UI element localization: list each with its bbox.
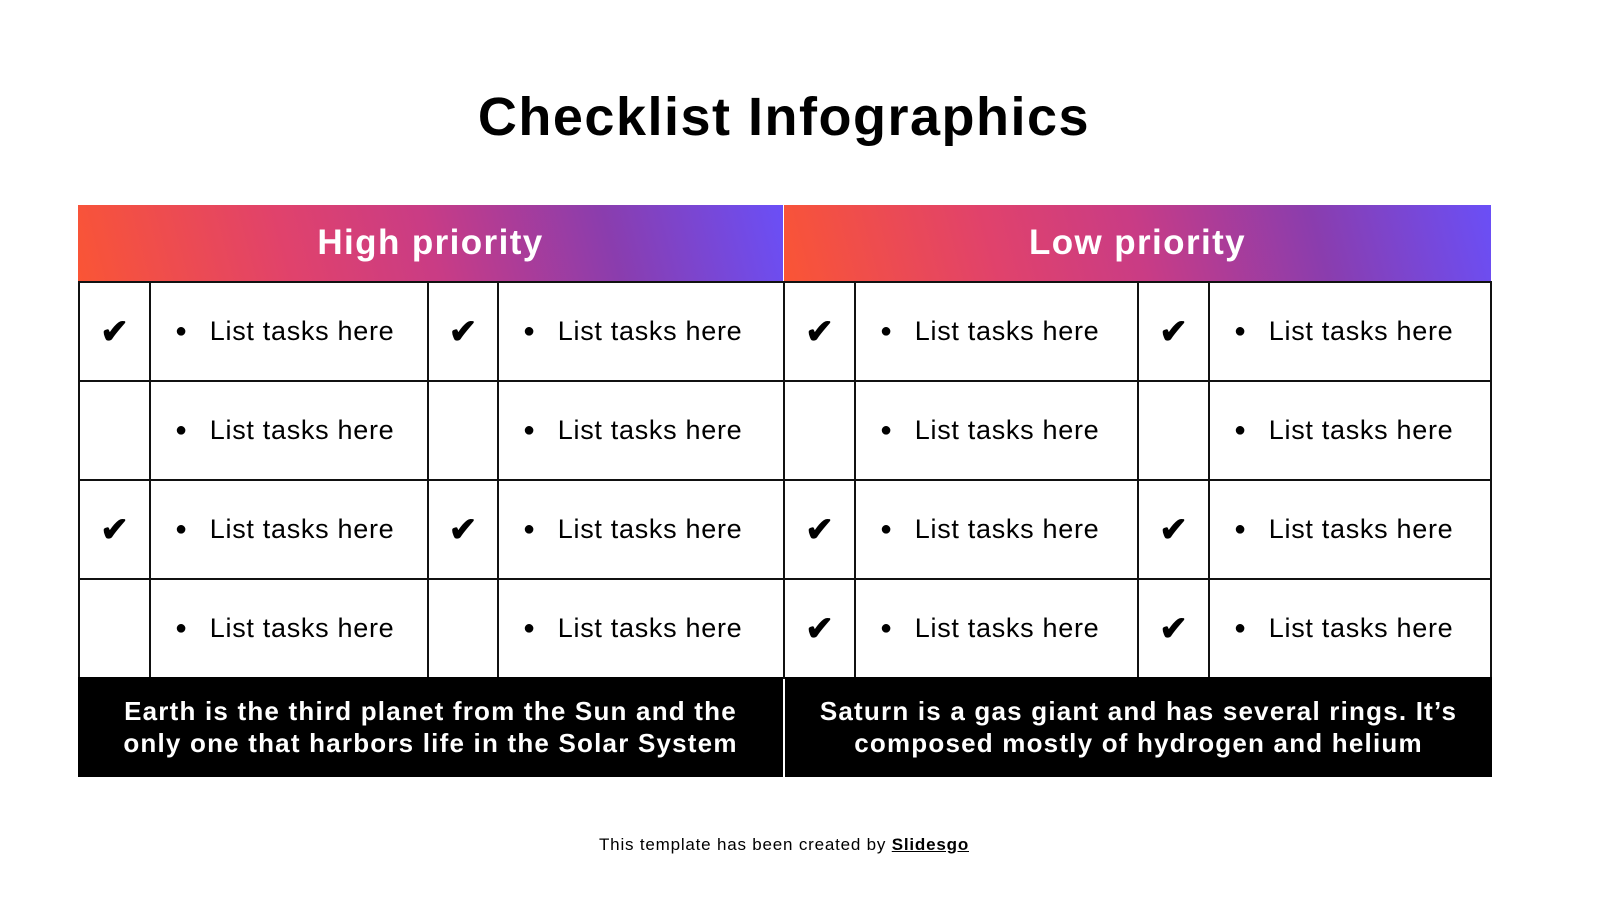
checklist table: ● [1234, 617, 1247, 639]
checklist table: List tasks here [558, 316, 742, 346]
checklist table: ● [1234, 320, 1247, 342]
checklist table: ● [880, 518, 893, 540]
checklist table: ● [1234, 518, 1247, 540]
checklist table: List tasks here [210, 415, 394, 445]
checklist table: List tasks here [1269, 316, 1453, 346]
checklist table: ✔ [100, 510, 129, 548]
checklist table: ● [523, 617, 536, 639]
checklist table: ✔ [805, 610, 834, 648]
header: low priority [784, 205, 1491, 281]
checklist table: ● [880, 419, 893, 441]
checklist table: ● [523, 320, 536, 342]
row 3 [78, 481, 1492, 578]
checklist table: ✔ [1159, 312, 1188, 350]
checklist table: List tasks here [210, 316, 394, 346]
footer text: Earth: only one that harbors life in the Solar System [123, 728, 738, 758]
checklist table: List tasks here [210, 613, 394, 643]
header: low priority: Low priority [1029, 223, 1246, 262]
checklist table: ● [175, 320, 188, 342]
checklist table: ✔ [1159, 510, 1188, 548]
credit: This template has been created by Slidesgo [599, 835, 969, 854]
checklist table: ✔ [449, 312, 477, 350]
checklist table: List tasks here [558, 613, 742, 643]
checklist table: ● [175, 518, 188, 540]
checklist table: ✔ [805, 312, 834, 350]
checklist table: ✔ [100, 312, 129, 350]
footer text: Earth: Earth is the third planet from the Sun and the [124, 696, 737, 726]
checklist table: List tasks here [1269, 415, 1453, 445]
footer text: Saturn [785, 677, 1492, 777]
checklist table: List tasks here [915, 415, 1099, 445]
checklist table: List tasks here [1269, 613, 1453, 643]
checklist table: List tasks here [915, 613, 1099, 643]
checklist table: ● [880, 320, 893, 342]
checklist table: ✔ [449, 510, 477, 548]
checklist table: List tasks here [1269, 514, 1453, 544]
header: high priority [78, 205, 783, 281]
checklist table: List tasks here [558, 514, 742, 544]
footer text: Saturn: Saturn is a gas giant and has several rings. It’s [820, 696, 1457, 726]
row 1 [78, 281, 1492, 380]
title: Checklist Infographics [478, 87, 1090, 147]
checklist table: List tasks here [210, 514, 394, 544]
row 4 [78, 580, 1492, 679]
checklist table: List tasks here [558, 415, 742, 445]
checklist table: ✔ [805, 510, 834, 548]
checklist table: ● [523, 419, 536, 441]
checklist table: ● [523, 518, 536, 540]
footer text: Saturn: composed mostly of hydrogen and helium [854, 728, 1423, 758]
checklist table: ● [175, 617, 188, 639]
checklist table: List tasks here [915, 514, 1099, 544]
checklist table: ● [1234, 419, 1247, 441]
checklist table: ● [880, 617, 893, 639]
checklist table: ● [175, 419, 188, 441]
row 2 [78, 382, 1492, 479]
checklist table: ✔ [1159, 610, 1188, 648]
footer text: Earth [78, 677, 783, 777]
header: high priority: High priority [317, 223, 544, 262]
checklist table: List tasks here [915, 316, 1099, 346]
